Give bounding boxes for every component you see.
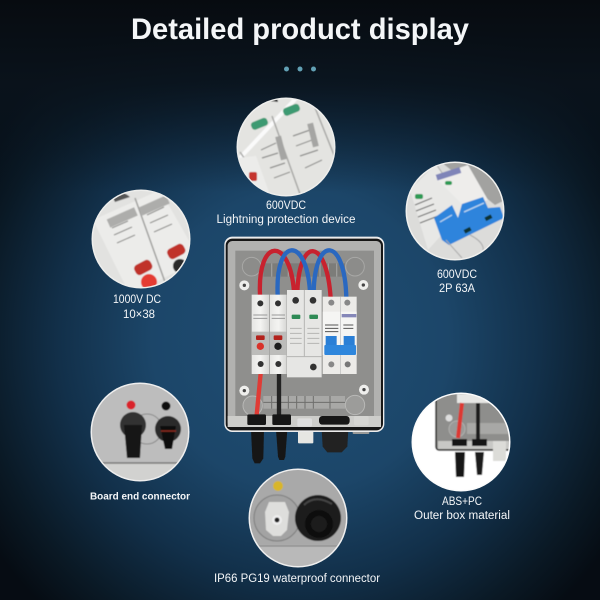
label: fuse holder: 10×38 (123, 307, 155, 321)
label: lightning protection device: 600VDC (266, 198, 306, 212)
connector and gland tops inside box (247, 414, 369, 427)
panel: board end connector (90, 382, 190, 483)
upper mounting rail (242, 257, 364, 277)
label: outer box material (414, 494, 510, 522)
label: DC breaker rating: 600VDC (437, 267, 477, 281)
label: DC breaker rating: 2P 63A (439, 281, 475, 295)
panel: fuse holder 1000V DC (92, 190, 190, 288)
red and blue wires (260, 250, 346, 298)
label: board end connector: Board end connector (90, 490, 190, 502)
label: fuse holder: 1000V DC (113, 292, 161, 306)
panel: lightning protection device (236, 98, 336, 196)
cable glands below box (298, 430, 369, 452)
label: waterproof connector: IP66 PG19 waterproof connector (214, 573, 380, 585)
surge protection device (287, 290, 322, 377)
junction box product photo (224, 237, 384, 463)
label: lightning protection device: Lightning protection device (216, 214, 356, 226)
cable connectors below box (251, 430, 287, 463)
title: Detailed product display (131, 13, 469, 46)
DC circuit breaker (323, 297, 357, 374)
lower mounting rail (243, 395, 365, 415)
panel: DC breaker 2P 63A (405, 158, 505, 261)
decorative three dots (284, 66, 316, 72)
mounting screws (239, 280, 369, 396)
label: outer box material: ABS+PC (442, 494, 482, 508)
lower wires (257, 373, 279, 416)
label: fuse holder (113, 292, 161, 321)
panel: ABS+PC outer box material (411, 390, 516, 492)
label: DC breaker rating (437, 267, 477, 295)
label: lightning protection device (216, 198, 356, 226)
panel: IP66 PG19 waterproof connector (248, 468, 348, 569)
fuse holders (252, 295, 287, 374)
label: outer box material: Outer box material (414, 510, 510, 522)
